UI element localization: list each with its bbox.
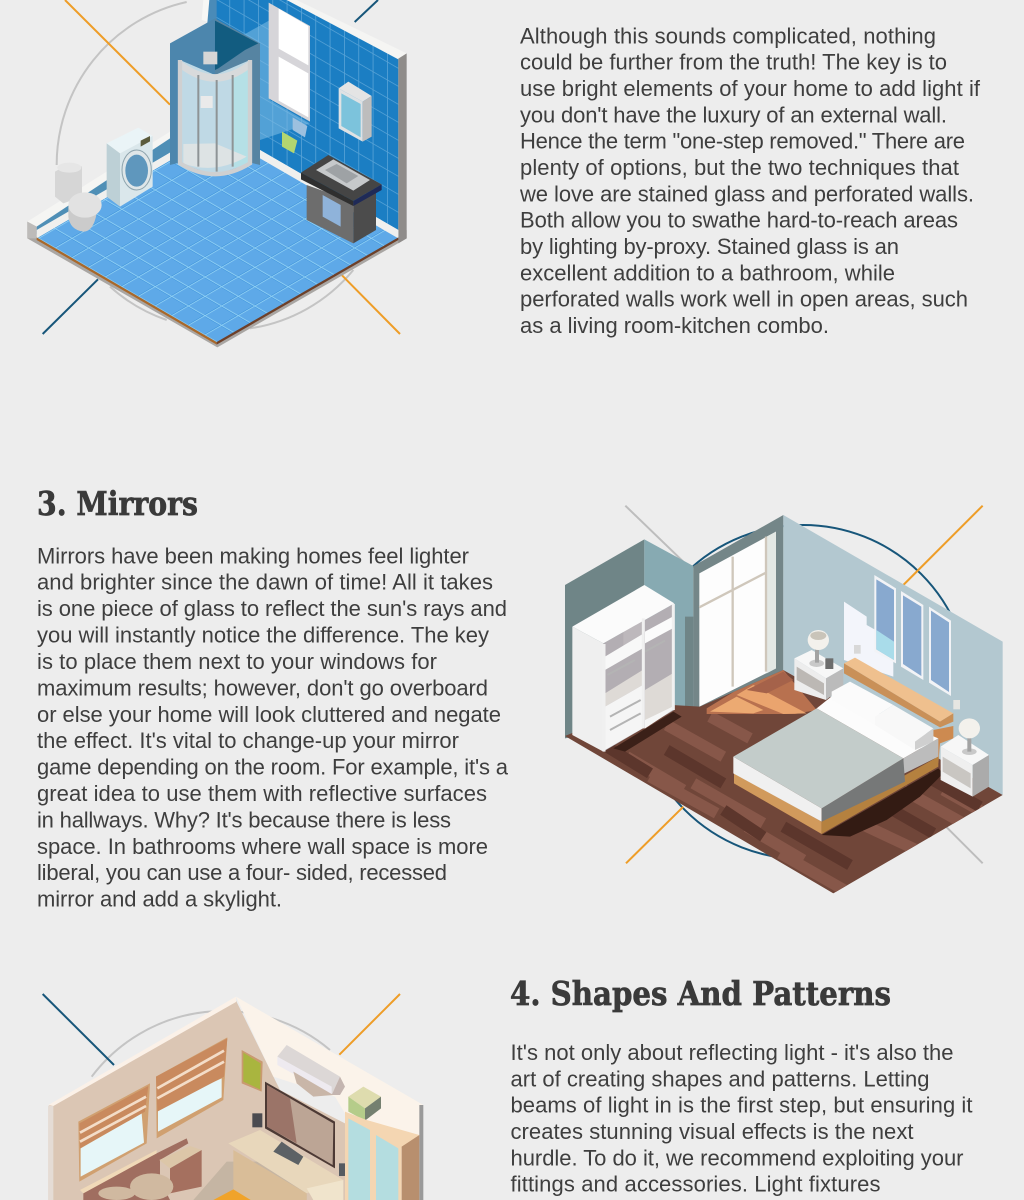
text: mirrors body copy: mirror and add a skylight. — [37, 887, 282, 912]
window on wall — [269, 3, 310, 122]
vanity unit — [301, 155, 382, 243]
toilet — [55, 163, 102, 232]
accent lines — [625, 506, 983, 863]
floor edge trim — [37, 237, 398, 345]
wall socket panels — [252, 1113, 345, 1176]
illustration: isometric living room, cropped by page edge — [43, 994, 423, 1200]
grey arc behind living room — [92, 1011, 330, 1077]
wood floor — [565, 670, 1002, 894]
light beam on wall — [243, 20, 310, 140]
text: one-step removed body copy: plenty of options, but the two techniques that — [520, 155, 959, 180]
bed and side table — [80, 1138, 202, 1200]
text: shapes and patterns body copy: beams of light in is the first step, but ensuring it — [510, 1093, 972, 1118]
text: one-step removed body copy: by lighting by-proxy. Stained glass is an — [520, 234, 899, 259]
grey circle behind bathroom — [57, 2, 353, 328]
floor base edge — [27, 222, 407, 347]
text: mirrors body copy: game depending on the room. For example, it's a — [37, 755, 509, 780]
text: mirrors body copy: space. In bathrooms where wall space is more — [37, 834, 488, 859]
text: mirrors body copy: is to place them next to your windows for — [37, 649, 437, 674]
wall cap and side — [202, 0, 407, 243]
orange rug — [213, 1189, 251, 1200]
air conditioner — [277, 1045, 345, 1097]
text: shapes and patterns body copy: It's not only about reflecting light - it's also the — [510, 1040, 954, 1065]
text: one-step removed body copy: excellent addition to a bathroom, while — [520, 260, 895, 285]
low left wall — [27, 132, 170, 238]
television — [265, 1082, 335, 1168]
text: mirrors body copy: and brighter since the dawn of time! All it takes — [37, 570, 493, 595]
left nightstand and lamp — [794, 630, 843, 700]
text: mirrors body copy: you will instantly notice the difference. The key — [37, 622, 489, 648]
illustration: isometric bathroom — [27, 0, 407, 347]
text: mirrors body copy: or else your home will look cluttered and negate — [37, 702, 501, 727]
text: mirrors body copy: liberal, you can use a four- sided, recessed — [37, 860, 447, 885]
text: one-step removed body copy: as a living room-kitchen combo. — [520, 313, 829, 338]
tv console — [228, 1130, 343, 1200]
text: one-step removed body copy: we love are stained glass and perforated walls. — [519, 181, 974, 206]
tiled floor — [37, 133, 398, 343]
baseboard right — [260, 150, 398, 238]
text: one-step removed body copy: Although this sounds complicated, nothing — [520, 23, 936, 48]
wall art — [242, 1050, 263, 1092]
text: mirrors body copy: is one piece of glass to reflect the sun's rays and — [37, 596, 507, 621]
text: mirrors body copy: Mirrors have been making homes feel lighter — [37, 543, 469, 568]
right wall tiles — [213, 0, 398, 230]
walls — [565, 515, 1003, 795]
sliding window door — [699, 532, 776, 707]
towels — [282, 117, 307, 153]
heading: 3. Mirrors: 3. Mirrors — [37, 484, 198, 523]
text: one-step removed body copy: perforated walls work well in open areas, such — [520, 287, 968, 312]
text: one-step removed body copy: use bright elements of your home to add light if — [520, 76, 981, 101]
text: one-step removed body copy: Hence the term "one-step removed." There are — [520, 129, 965, 154]
text: one-step removed body copy: Both allow you to swathe hard-to-reach areas — [520, 208, 958, 233]
text: mirrors body copy: the effect. It's vital to change-up your mirror — [37, 728, 459, 753]
windows with blinds — [78, 1037, 227, 1182]
text: mirrors body copy: maximum results; however, don't go overboard — [37, 675, 488, 700]
shower enclosure — [170, 18, 260, 175]
washing machine — [107, 128, 153, 207]
text: shapes and patterns body copy: art of creating shapes and patterns. Letting — [510, 1066, 930, 1091]
headboard — [844, 658, 953, 763]
glass wardrobe — [345, 1112, 419, 1200]
green box — [348, 1087, 381, 1121]
navy circle behind bedroom — [636, 525, 970, 859]
text: shapes and patterns body copy: hurdle. To do it, we recommend exploiting your — [510, 1145, 964, 1170]
mirror cabinet — [339, 82, 372, 142]
heading: 4. Shapes And Patterns: 4. Shapes And Patterns — [510, 974, 891, 1013]
right nightstand and lamp — [941, 718, 989, 797]
text: mirrors body copy: in hallways. Why? It's because there is less — [37, 807, 451, 832]
text: shapes and patterns body copy: creates stunning visual effects is the next — [510, 1119, 914, 1144]
text: one-step removed body copy: could be further from the truth! The key is to — [520, 50, 947, 75]
wall windows and light patch — [844, 575, 960, 709]
accent lines — [43, 994, 400, 1065]
room walls — [48, 997, 423, 1200]
text: mirrors body copy: great idea to use them with reflective surfaces — [37, 781, 487, 806]
illustration: isometric bedroom — [565, 505, 1003, 894]
text: one-step removed body copy: you don't have the luxury of an external wall. — [520, 102, 947, 127]
text: shapes and patterns body copy: fittings and accessories. Light fixtures — [510, 1172, 880, 1197]
wardrobe — [572, 585, 674, 752]
bed — [733, 682, 938, 834]
accent lines — [43, 0, 400, 334]
